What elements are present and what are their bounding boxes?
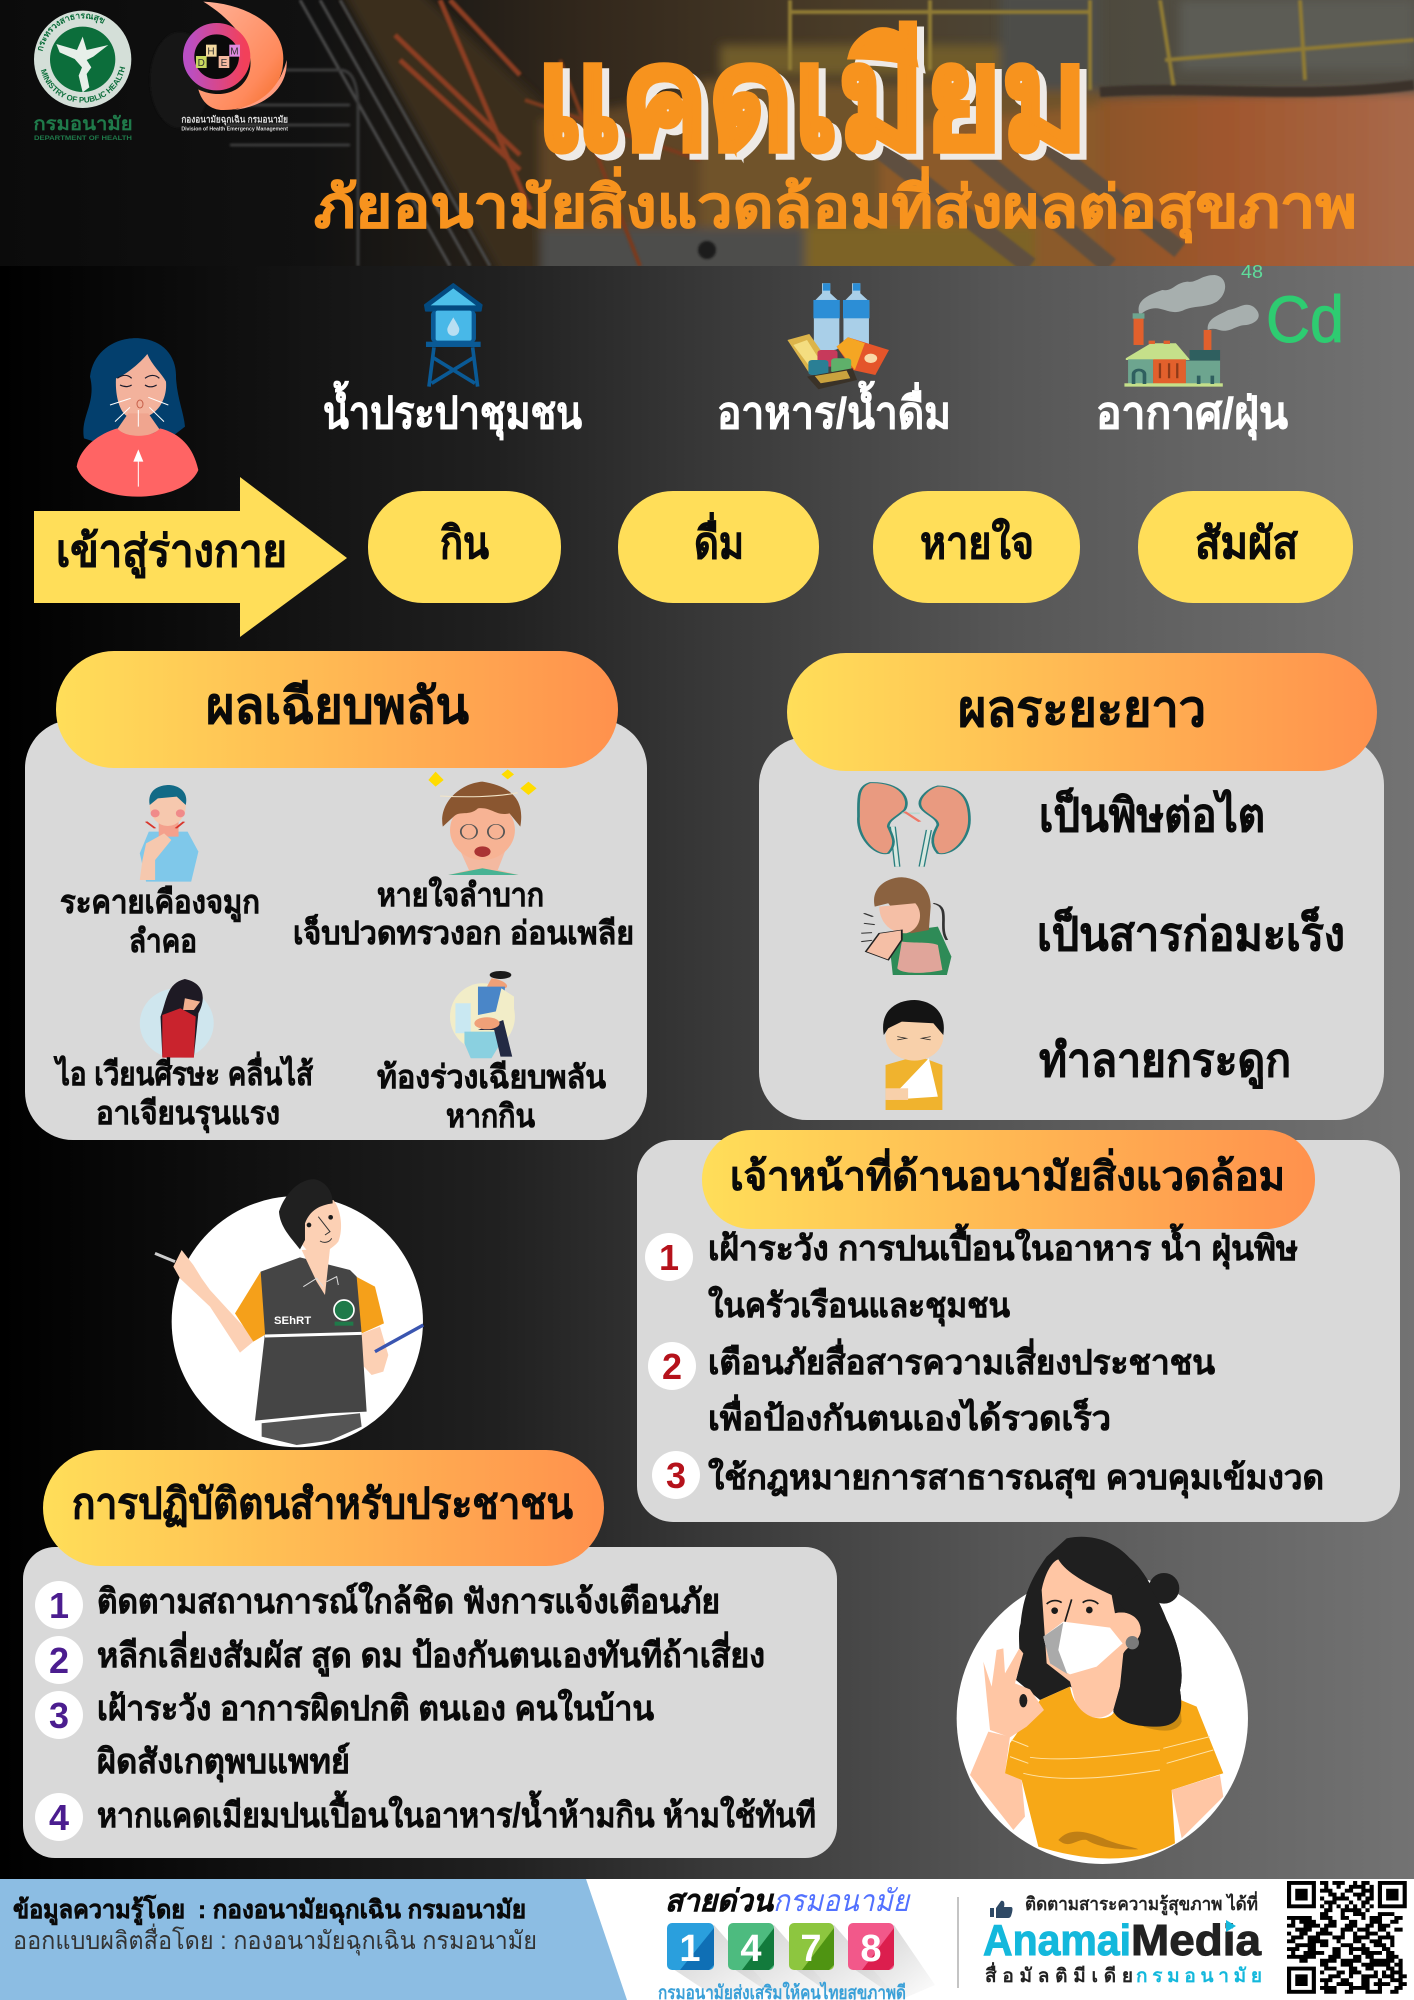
item 3 [35, 1688, 654, 1783]
logo: Ministry of Public Health / Department of Health: DEPARTMENT OF HEALTH [34, 135, 132, 142]
icon: factory with smoke [1124, 275, 1259, 387]
icon: bottles and food [787, 283, 889, 389]
logo: Ministry of Public Health / Department of Health: MINISTRY OF PUBLIC HEALTH [40, 66, 126, 103]
icon: man on toilet [450, 971, 515, 1058]
illustration: health officer in SEhRT vest: SEhRT [274, 1315, 311, 1327]
text: carcinogen: เป็นสารก่อมะเร็ง [1037, 906, 1345, 960]
item 2 [648, 1338, 1215, 1438]
text: acute diarrhea [377, 1059, 606, 1134]
text: breathing difficulty: หายใจลำบาก [377, 876, 544, 913]
item 4: 4 [49, 1797, 69, 1838]
pill: breathe: หายใจ [920, 517, 1034, 568]
QR code [1287, 1881, 1407, 1994]
text: irritated nose and throat: ระคายเคืองจมูก [60, 884, 260, 923]
text: cough and nausea: อาเจียนรุนแรง [96, 1095, 280, 1134]
hotline number tiles 1478: 1 [679, 1928, 701, 1970]
credits: ข้อมูลความรู้โดย [13, 1894, 185, 1926]
label: food and drink: อาหาร/น้ำดื่ม [717, 380, 951, 438]
hotline heading: กรมอนามัย [773, 1885, 911, 1918]
illustration: woman with FFP2 mask [957, 1537, 1248, 1864]
item 2: เพื่อป้องกันตนเองได้รวดเร็ว [708, 1394, 1111, 1438]
illustration: health officer in SEhRT vest [155, 1179, 423, 1447]
icon: boy with arm sling [883, 1000, 944, 1110]
hotline heading [665, 1885, 911, 1918]
hotline heading: สายด่วน [665, 1885, 774, 1918]
credits: : กองอนามัยฉุกเฉิน กรมอนามัย [198, 1896, 526, 1926]
text: cough and nausea [53, 1051, 313, 1134]
logo: Division of Health Emergency Management: E [221, 58, 228, 69]
panel: environmental health officers [637, 1130, 1400, 1522]
item 3: ผิดสังเกตุพบแพทย์ [97, 1742, 350, 1783]
label: air and dust: อากาศ/ฝุ่น [1096, 389, 1288, 441]
hotline number tiles 1478: 4 [740, 1928, 762, 1970]
heading: advice: การปฏิบัติตนสำหรับประชาชน [72, 1480, 573, 1527]
panel: advice for the public [23, 1450, 837, 1858]
item 2: 2 [49, 1640, 69, 1681]
item 2: 2 [662, 1346, 682, 1387]
icon: dizzy man [428, 769, 537, 875]
follow text: ติดตามสาระความรู้สุขภาพ ได้ที่ [1025, 1891, 1258, 1916]
icon: boy with sore throat [140, 785, 198, 882]
logo: Ministry of Public Health / Department of Health [33, 10, 133, 142]
text: destroys bones: ทำลายกระดูก [1039, 1034, 1291, 1089]
logo: Division of Health Emergency Management: M [230, 47, 239, 58]
item 1: เฝ้าระวัง การปนเปื้อนในอาหาร น้ำ ฝุ่นพิษ [708, 1223, 1298, 1270]
heading: long-term effects [787, 653, 1377, 771]
heading: acute effects [56, 651, 618, 768]
logo: Ministry of Public Health / Department of Health: กระทรวงสาธารณสุข [38, 13, 105, 52]
logo: Division of Health Emergency Management: กองอนามัยฉุกเฉิน กรมอนามัย [181, 114, 288, 125]
cadmium symbol Cd 48 [1241, 262, 1344, 356]
title: แคดเมียม [536, 17, 1088, 180]
item 3: 3 [49, 1695, 69, 1736]
item 1: ในครัวเรือนและชุมชน [708, 1285, 1010, 1327]
heading: officers: เจ้าหน้าที่ด้านอนามัยสิ่งแวดล้อม [730, 1148, 1285, 1199]
AnamaiMedia logo: สื่อมัลติมีเดีย [985, 1962, 1133, 1987]
text: irritated nose and throat: ลำคอ [129, 923, 197, 959]
item 1: 1 [49, 1585, 69, 1626]
heading: long-term effects: ผลระยะยาว [958, 681, 1206, 737]
logo: Ministry of Public Health / Department of Health: กรมอนามัย [33, 113, 133, 134]
cadmium symbol Cd 48: 48 [1241, 262, 1263, 282]
divider [957, 1897, 959, 1988]
hotline number tiles 1478 [667, 1923, 935, 2000]
arrow: enters the body [34, 477, 347, 637]
item 4 [35, 1790, 816, 1841]
text: breathing difficulty: เจ็บปวดทรวงอก อ่อนเพลีย [293, 913, 634, 951]
AnamaiMedia logo: Anamai [983, 1916, 1131, 1965]
pill: touch: สัมผัส [1195, 519, 1298, 568]
text: acute diarrhea: ท้องร่วงเฉียบพลัน [377, 1059, 606, 1095]
pill: eat: กิน [440, 519, 489, 568]
item 3: 3 [666, 1455, 686, 1496]
item 1: ติดตามสถานการณ์ใกล้ชิด ฟังการแจ้งเตือนภัย [97, 1581, 720, 1621]
arrow: enters the body: เข้าสู่ร่างกาย [56, 527, 287, 578]
credits: ออกแบบผลิตสื่อโดย : กองอนามัยฉุกเฉิน กรมอนามัย [13, 1923, 537, 1956]
heading: officers [702, 1130, 1315, 1229]
text: toxic to kidneys: เป็นพิษต่อไต [1039, 787, 1265, 841]
pill: drink: ดื่ม [694, 512, 744, 568]
item 1: 1 [659, 1237, 679, 1278]
title: แคดเมียม [543, 23, 1095, 186]
heading: acute effects: ผลเฉียบพลัน [206, 678, 469, 734]
panel: acute effects [25, 651, 647, 1140]
icon: woman breathing [77, 338, 198, 497]
hotline number tiles 1478: 8 [860, 1928, 882, 1970]
subtitle: ภัยอนามัยสิ่งแวดล้อมที่ส่งผลต่อสุขภาพ [314, 166, 1357, 244]
icon: water tower [425, 284, 482, 387]
text: breathing difficulty [293, 876, 634, 951]
logo: Division of Health Emergency Management: Division of Health Emergency Management [181, 127, 288, 133]
logo: Division of Health Emergency Management: D [198, 58, 205, 69]
text: acute diarrhea: หากกิน [446, 1098, 535, 1134]
item 2: หลีกเลี่ยงสัมผัส สูด ดม ป้องกันตนเองทันทีถ้าเสี่ยง [97, 1631, 765, 1677]
heading: advice [43, 1450, 604, 1566]
hotline number tiles 1478: 7 [800, 1928, 822, 1970]
AnamaiMedia logo: กรมอนามัย [1136, 1966, 1262, 1987]
text: irritated nose and throat [60, 884, 260, 959]
icon: coughing woman [140, 979, 214, 1058]
item 1 [645, 1223, 1298, 1327]
item 1 [35, 1581, 720, 1629]
label: tap water: น้ำประปาชุมชน [323, 380, 582, 441]
item 4: หากแคดเมียมปนเปื้อนในอาหาร/น้ำห้ามกิน ห้ามใช้ทันที [97, 1790, 816, 1835]
header photo: industrial plant [0, 0, 1414, 276]
pill: breathe [873, 491, 1080, 603]
item 2 [35, 1631, 765, 1684]
logo: Division of Health Emergency Management: H [207, 47, 215, 58]
text: cough and nausea: ไอ เวียนศีรษะ คลื่นไส้ [53, 1051, 313, 1092]
cadmium symbol Cd 48: Cd [1266, 282, 1344, 356]
item 3: ใช้กฎหมายการสาธารณสุข ควบคุมเข้มงวด [708, 1457, 1324, 1499]
item 2: เตือนภัยสื่อสารความเสี่ยงประชาชน [708, 1338, 1215, 1382]
pill: touch [1138, 491, 1353, 603]
footer band [0, 1879, 1414, 2000]
icon: thumbs up [990, 1901, 1012, 1918]
AnamaiMedia logo [983, 1916, 1262, 1987]
logo: Division of Health Emergency Management [181, 2, 288, 133]
pill: drink [618, 491, 819, 603]
item 3: เฝ้าระวัง อาการผิดปกติ ตนเอง คนในบ้าน [97, 1688, 654, 1728]
icon: kidneys [858, 783, 969, 867]
credits [13, 1894, 537, 1956]
panel: long-term effects [759, 653, 1384, 1120]
AnamaiMedia logo: Media [1131, 1916, 1262, 1965]
icon: coughing person with lungs [861, 877, 951, 975]
pill: eat [368, 491, 561, 603]
